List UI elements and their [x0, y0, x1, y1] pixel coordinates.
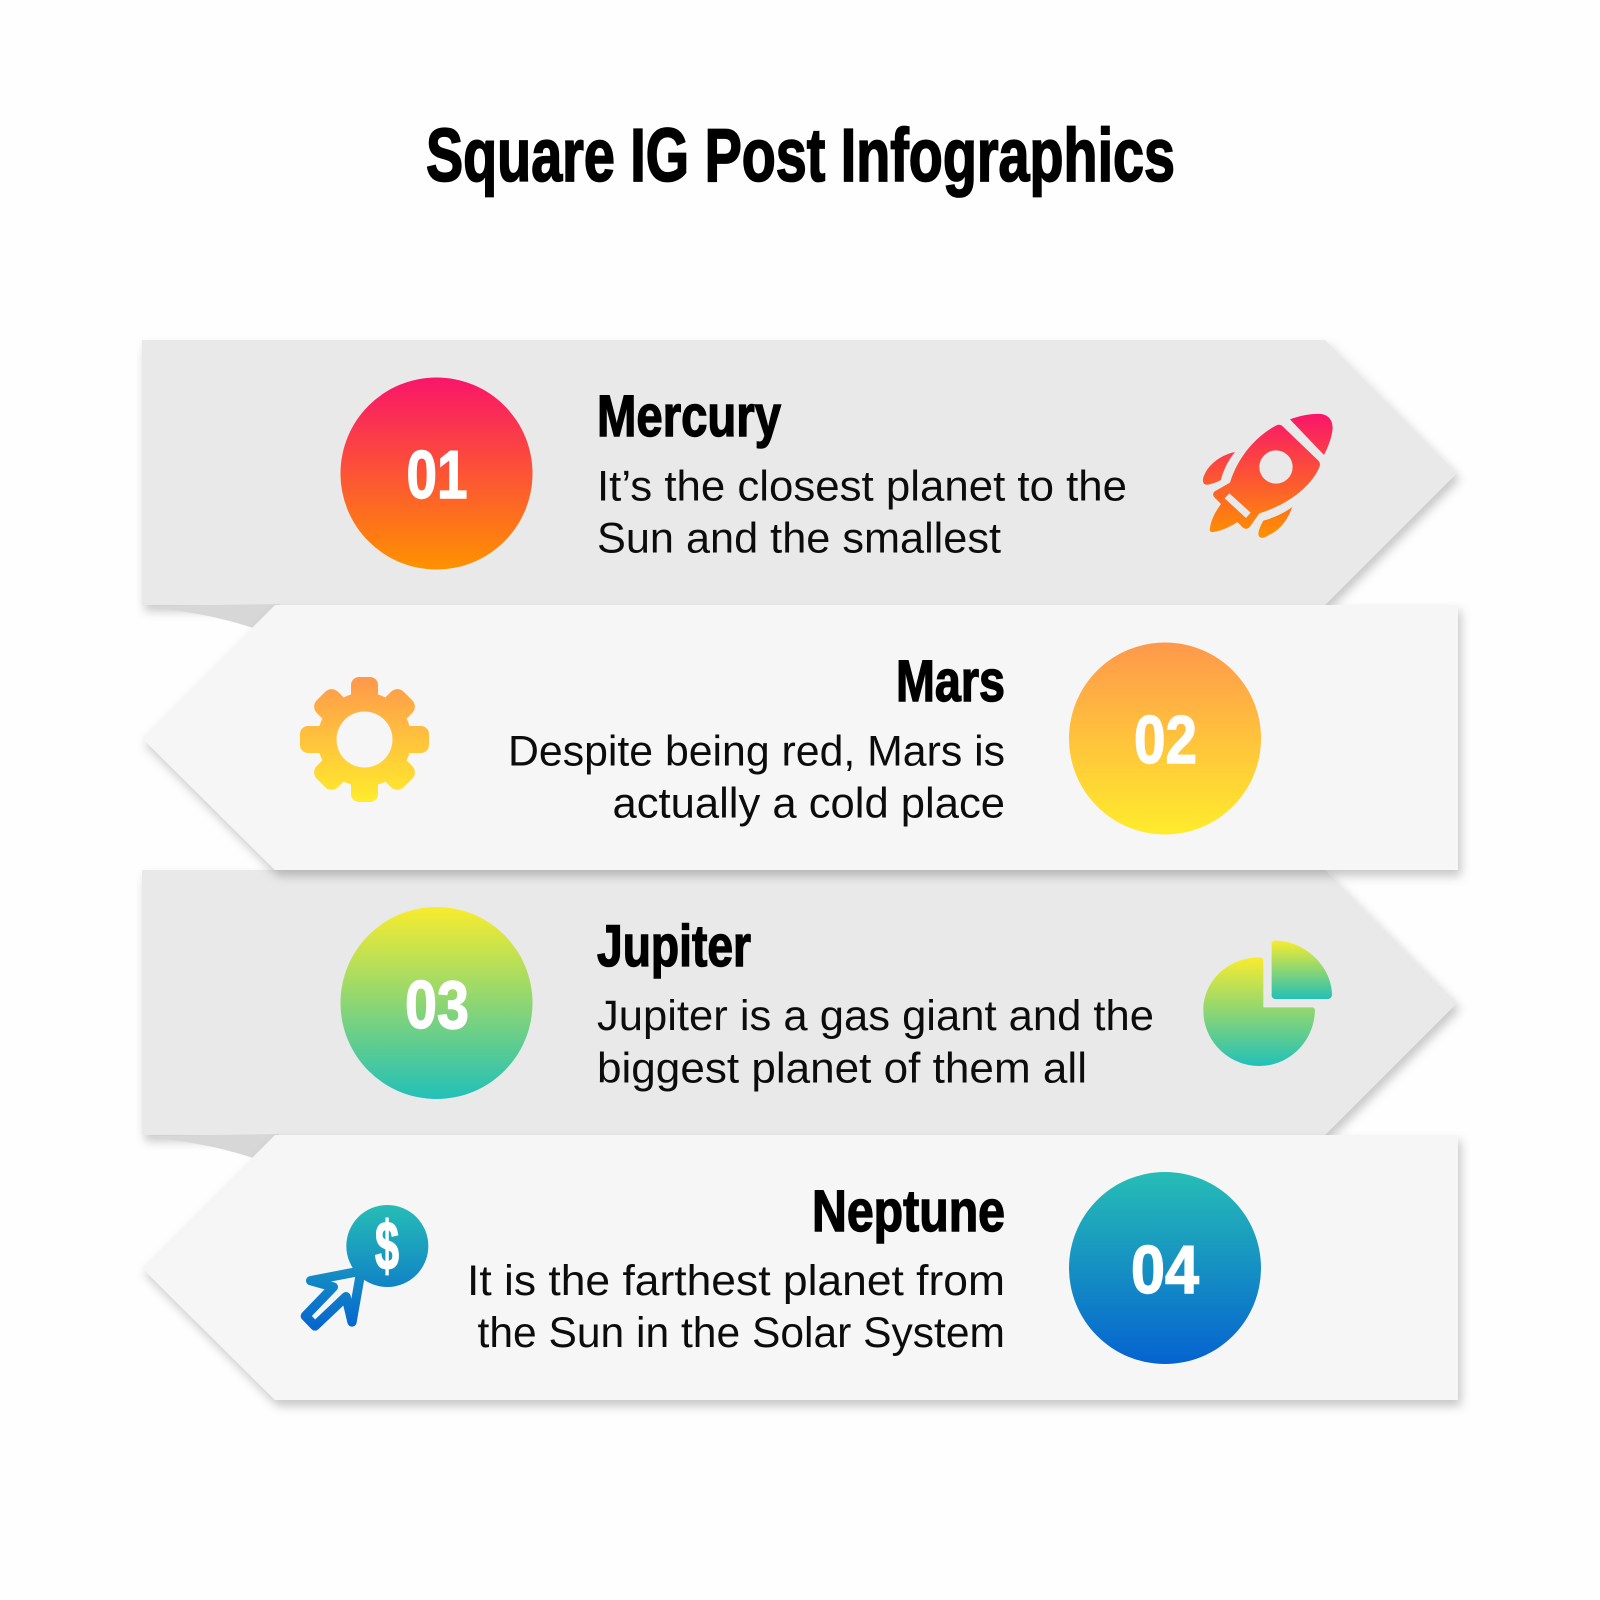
description: neptune: [467, 1257, 1005, 1357]
item: neptune: [305, 1172, 1261, 1364]
number badge 04: 04: [1131, 1232, 1199, 1308]
icon: cursor with dollar coin: [305, 1205, 428, 1326]
title: Square IG Post Infographics: [426, 113, 1175, 197]
heading: jupiter: Jupiter: [597, 914, 751, 979]
description: jupiter: [597, 992, 1154, 1092]
description: mars: actually a cold place: [612, 780, 1005, 828]
panel: neptune band: [142, 1135, 1458, 1400]
panel: jupiter band: [142, 870, 1457, 1135]
description: mercury: [597, 462, 1127, 562]
item: mars: [290, 642, 1261, 834]
heading: neptune: Neptune: [812, 1179, 1005, 1244]
description: jupiter: biggest planet of them all: [597, 1044, 1087, 1092]
number badge 01: [340, 378, 532, 570]
item: jupiter: [340, 907, 1332, 1099]
description: neptune: the Sun in the Solar System: [478, 1309, 1005, 1357]
fold shadow under jupiter: [146, 1134, 280, 1158]
description: mercury: Sun and the smallest: [597, 514, 1001, 562]
item: mercury: [340, 378, 1333, 570]
panel: mars band: [142, 605, 1458, 870]
description: mars: [508, 728, 1005, 828]
number badge 02: [1069, 642, 1261, 834]
description: mars: Despite being red, Mars is: [508, 728, 1005, 776]
icon: pie chart: [1203, 941, 1332, 1066]
icon: gear: [300, 677, 429, 802]
heading: mercury: Mercury: [597, 384, 781, 449]
icon: rocket: [1203, 414, 1333, 538]
number badge 03: 03: [405, 967, 469, 1043]
description: neptune: It is the farthest planet from: [467, 1257, 1005, 1305]
number badge 01: 01: [406, 437, 468, 513]
icon: cursor with dollar coin: $: [375, 1208, 399, 1284]
fold shadow under mercury: [146, 604, 280, 628]
description: jupiter: Jupiter is a gas giant and the: [597, 992, 1154, 1040]
number badge 04: [1069, 1172, 1261, 1364]
panel: mercury band: [142, 340, 1457, 605]
number badge 02: 02: [1134, 702, 1197, 778]
heading: mars: Mars: [896, 649, 1005, 714]
number badge 03: [340, 907, 532, 1099]
description: mercury: It’s the closest planet to the: [597, 462, 1127, 510]
